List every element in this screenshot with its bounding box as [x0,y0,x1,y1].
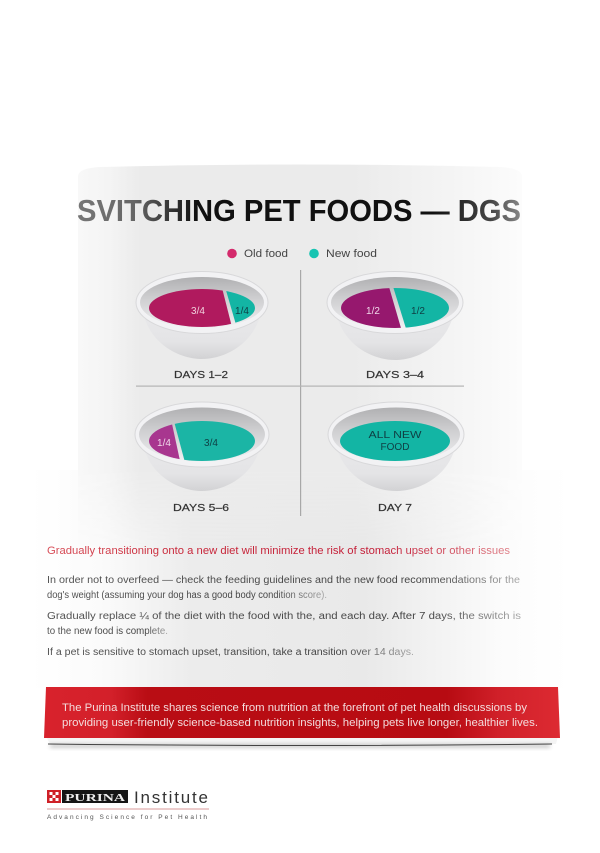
panel: main card background [86,164,478,687]
bowl: days 3-4 [327,272,463,360]
title: SVITCHING PET FOODS — DGS [77,193,521,228]
callout: red banner: providing user-friendly science-based nutrition insights, helping pets live longer, healthier lives. [62,717,538,729]
food: new 1/2 [394,288,449,328]
food: old 1/2 [341,288,401,328]
logo: Purina Institute [47,788,209,821]
bowl: day 7: FOOD [381,442,409,453]
label: days 3-4: DAYS 3–4 [366,369,424,381]
food: all new [340,421,450,461]
icon: checkerboard [47,790,61,803]
bowl: days 1-2: 1/4 [235,306,249,317]
bowl: days 5-6: 1/4 [157,438,171,449]
bowl: days 1-2 [136,272,268,359]
label: days 5-6: DAYS 5–6 [173,502,229,514]
red subheading: Gradually transitioning onto a new diet will minimize the risk of stomach upset or other issues [47,545,511,557]
body text [47,575,521,658]
legend [227,248,377,260]
logo: Purina Institute: Institute [134,788,208,807]
bowl: days 1-2: 3/4 [191,306,205,317]
body text: to the new food is complete. [47,626,168,637]
bowl: days 5-6: 3/4 [204,438,218,449]
food: new 3/4 [174,421,255,461]
bowl: day 7: ALL NEW [368,430,422,441]
body text: If a pet is sensitive to stomach upset, transition, take a transition over 14 days. [47,647,414,658]
logo: Purina Institute: Advancing Science for Pet Health [47,814,207,821]
vertical divider [300,270,301,516]
logo: Purina Institute: PURINA [65,792,125,804]
food: old 3/4 [149,289,232,327]
label: days 1-2: DAYS 1–2 [174,369,228,381]
legend: New food [326,248,377,260]
label: day 7: DAY 7 [378,502,412,514]
bowl: days 3-4: 1/2 [366,306,380,317]
callout: red banner [44,687,560,747]
food: new 1/4 [226,291,255,323]
legend: Old food [244,248,288,260]
body text: Gradually replace ¼ of the diet with the food with the, and each day. After 7 days, the switch is [47,610,521,622]
body text: In order not to overfeed — check the feeding guidelines and the new food recommendations for the [47,575,520,586]
bowl: days 3-4: 1/2 [411,306,425,317]
food: old 1/4 [149,424,180,460]
bowl: day 7 [328,402,464,491]
body text: dog's weight (assuming your dog has a good body condition score). [47,590,327,601]
callout: red banner: The Purina Institute shares science from nutrition at the forefront of pet health discussions by [62,702,528,714]
horizontal divider [136,386,464,387]
bowl: days 5-6 [135,402,269,491]
